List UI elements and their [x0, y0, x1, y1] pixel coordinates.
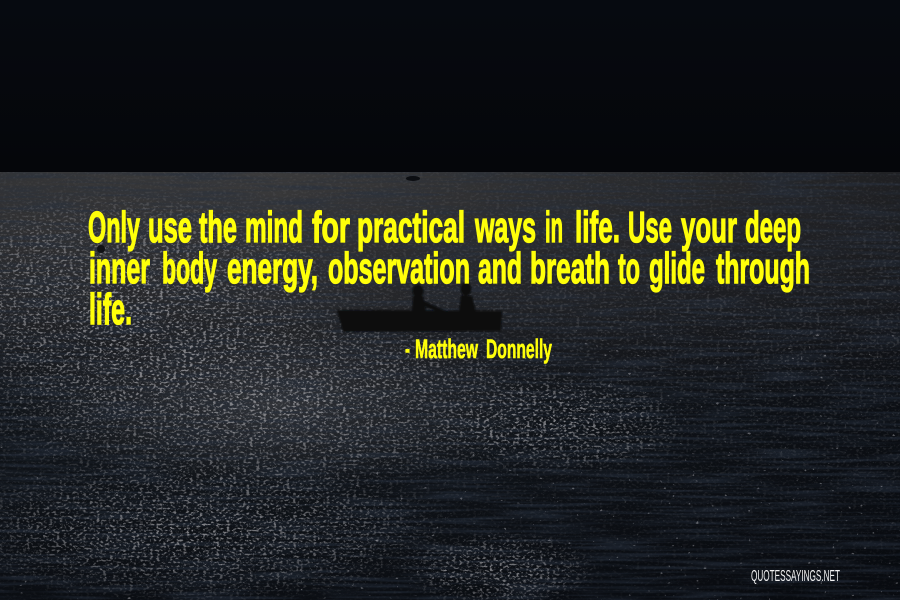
quote text: Use — [628, 203, 672, 252]
quote poster — [0, 172, 900, 600]
author attribution: - — [405, 334, 410, 364]
quote text: practical — [357, 203, 465, 252]
quote text — [88, 203, 810, 334]
quote text: your — [681, 203, 737, 252]
quote text: Only — [88, 203, 140, 252]
quote text: deep — [745, 203, 801, 252]
night sky — [0, 0, 900, 172]
quote text: for — [312, 203, 350, 252]
quote text: in — [545, 203, 563, 252]
lake water — [0, 172, 900, 600]
quote text: the — [199, 203, 237, 252]
quote text: life. — [89, 285, 132, 334]
quote text: body — [162, 244, 217, 293]
distant boat — [406, 176, 420, 181]
quote text: life. — [575, 203, 620, 252]
quote text: mind — [245, 203, 303, 252]
quote text: use — [148, 203, 192, 252]
rowing boat silhouette — [337, 282, 502, 332]
quote text: observation — [328, 244, 470, 293]
quote text: to — [618, 244, 640, 293]
quote text: ways — [474, 203, 536, 252]
quote text: breath — [530, 244, 610, 293]
author attribution: Matthew — [415, 334, 479, 364]
buoy — [97, 245, 105, 253]
author attribution: Donnelly — [486, 334, 552, 364]
quote text: through — [716, 244, 810, 293]
quote text: inner — [89, 244, 150, 293]
quote text: energy, — [227, 244, 318, 293]
quote text: and — [478, 244, 522, 293]
quote text: glide — [649, 244, 705, 293]
